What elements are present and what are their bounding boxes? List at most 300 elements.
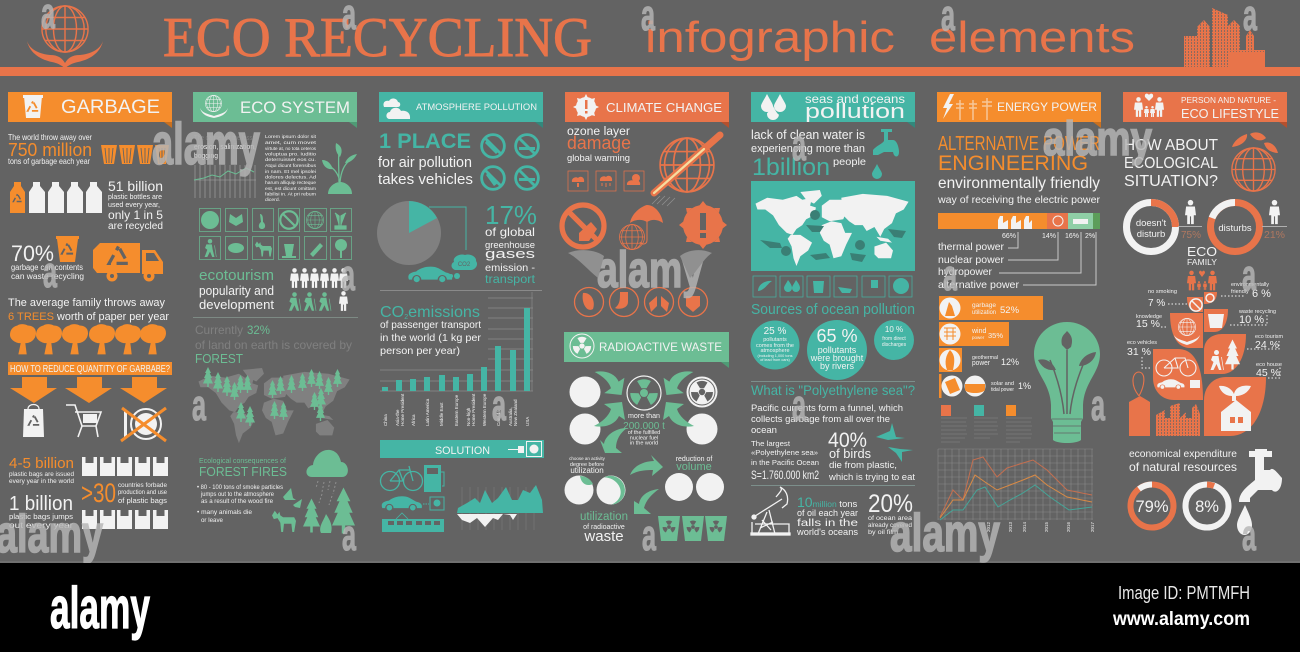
chart: energy lines: 2015 [1044,521,1049,532]
labels: eco lifestyle shares [1127,282,1283,379]
diagram: eco lifestyle leaves [1129,292,1280,436]
watermarks: a [1242,251,1256,300]
text: 750 million tons: tons of garbage each year [8,156,90,166]
text: how about ecological situation: SITUATION? [1124,173,1218,190]
chart: pie 17% [377,201,466,265]
map: forests of the world [198,367,350,443]
text: 51 billion bottles [108,178,163,232]
icon: reusable bag [23,404,44,437]
text: economical expenditure [1129,448,1237,474]
chart: CO2 bars: Middle East [439,402,444,426]
text: CO2 emissions [380,304,482,357]
circles: pollution sources: of lead from cars) [760,358,791,362]
legend: energy shares: nuclear power [938,254,1005,266]
bars: alternative energy: 12% [1001,357,1019,367]
chart: 8% donut [1186,484,1228,528]
text: utilization of radioactive waste: waste [583,528,624,545]
text: reduction of volume: volume [676,461,712,473]
labels: eco lifestyle shares: no smoking [1148,289,1177,295]
heading: eco lifestyle [1123,92,1287,128]
circles: pollution sources: were brought [810,353,864,363]
chart: area solution [457,485,543,530]
text: clean water: experiencing more than [751,143,865,155]
text: polyethylene sea: What is "Polyethylene sea"? [751,382,915,398]
icon: recycling can [56,236,79,262]
text: erosion causes [194,135,256,160]
icon: tap and drop [1237,449,1282,535]
heading: radioactive waste: RADIOACTIVE WASTE [599,342,722,354]
text: CO2 emissions: 2 [404,314,408,321]
header [0,6,1300,76]
icon: light bulb with sprout [1034,322,1100,443]
heading: eco lifestyle: ECO LIFESTYLE [1181,107,1279,121]
icon: recycling process circles [570,376,718,444]
circles: pollution sources: 65 % [816,326,858,346]
icon: car with CO2 cloud [408,254,477,282]
labels: eco lifestyle shares: friendly [1231,289,1249,295]
stat: 21%: 21% [1264,229,1285,241]
labels: eco lifestyle shares: 24 % [1255,339,1279,351]
stat: 40% of birds: which is trying to eat [828,472,915,483]
text: forest fires: • many animals die [197,510,253,516]
text: economical expenditure: economical expenditure [1129,448,1237,460]
text: 750 million tons: The world throw away over [8,132,92,142]
legend: energy shares: 2% [1085,233,1095,240]
text: average family: The average family throws away [8,297,165,309]
text: lorem ipsum: deterruisset eos cu. [265,157,316,162]
stat: more than 30 countries: of plastic bags [118,498,168,505]
text: average family: worth of paper per year [56,311,169,323]
chart: energy lines: 2013 [1008,521,1013,532]
stat: 4-5 billion: plastic bags are issued [9,471,74,478]
stat: 10 million tons: falls in the [797,518,859,529]
stat: 1 billion [9,493,74,530]
icon: utilization circles [564,470,630,506]
text: erosion causes: erosion, salinization, [194,144,256,151]
labels: eco lifestyle shares: eco house [1256,362,1282,368]
heading: solution: SOLUTION [435,445,490,457]
stat: 17%: greenhouse [485,240,535,250]
text: utilization degree: choose an activity [569,456,606,461]
labels: eco lifestyle shares: 31 % [1127,346,1151,358]
text: polyethylene sea: The largest [751,439,791,448]
stat: 4-5 billion [9,455,74,485]
chart: energy lines: 2017 [1090,521,1095,532]
stat: 10 million tons: world's oceans [796,527,858,538]
text: lorem ipsum: dicerd. [265,197,280,202]
stat: 40% of birds: 40% [828,429,867,452]
text: alternative power engineering: way of receiving the electric power [937,194,1100,206]
chart: energy share bar [938,213,1100,229]
arrows down [10,377,167,403]
chart: energy lines: 2014 [1022,521,1027,532]
stat: 17%: 17% [485,200,537,230]
icon: tap and drop [872,129,899,179]
text: CO2 emissions: emissions [408,304,480,321]
heading: seas: pollution [805,101,905,123]
chart: energy lines: 2016 [1066,521,1071,532]
heading: radioactive waste [564,332,729,368]
text: reduction of volume: reduction of [676,456,712,463]
text: 1 place [378,130,473,188]
text: lorem ipsum: dolores delectus. Ad [265,174,316,180]
circles: pollution sources: from direct [882,336,906,342]
chart: 8% donut: 8% [1195,498,1219,516]
text: 200 000 t: nuclear fuel [630,436,658,442]
icon: plastic bags row 1 [82,457,168,476]
bars: alternative energy: power [972,360,991,367]
text: 200 000 t: in the world [630,440,658,446]
icon: crossed plate [121,408,166,441]
chart: CO2 bars: New Zealand [513,399,518,426]
stat: 17%: emission - [485,262,536,274]
chart: energy lines: 2012 [986,521,991,532]
text: 51 billion bottles: plastic bottles are [108,192,162,201]
icon: oil derrick [751,487,790,535]
stat: 17%: transport [485,274,536,286]
icon: plastic bags row 2 [82,510,168,529]
chart: mini line [194,165,256,198]
text: CO2 emissions: person per year) [380,345,460,357]
circles: pollution sources: discharges [882,342,907,348]
footer: alamy strip [0,563,1300,652]
text: forest fires [197,458,287,524]
text: forest fires: Ecological consequences of [199,458,286,465]
stat: 17%: of global [485,225,535,239]
icon: globe and thermometer [654,135,720,193]
chart: CO2 bars: Eastern Europe [454,394,459,426]
text: garbage can contents [11,263,84,281]
stat: 75%: 75% [1181,229,1201,241]
circles: pollution sources: pollutants [818,345,857,355]
text: 51 billion bottles: 51 billion [108,178,163,194]
text: ozone layer: damage [567,133,631,153]
circles: pollution sources: atmosphere [760,348,790,354]
panel: energy power [937,92,1101,532]
text: 51 billion bottles: only 1 in 5 [108,208,163,222]
heading: eco lifestyle: PERSON AND NATURE - [1181,96,1276,105]
legend: energy shares [938,232,1096,291]
chart: CO2 bars: Asia-the [395,409,400,426]
text: clean water: people [833,157,866,168]
labels: eco lifestyle shares: 10 % [1239,314,1264,326]
stat: 21% [1262,200,1287,241]
labels: eco lifestyle shares: 15 % [1136,318,1160,330]
watermarks: a [342,511,356,560]
bars: alternative energy: 52% [1000,305,1020,316]
text: CO2 emissions: in the world (1 kg per [380,332,482,344]
heading: atmosphere: ATMOSPHERE POLLUTION [416,102,537,113]
legend: energy shares: 16% [1065,233,1079,240]
watermarks: alamy [0,505,103,564]
watermarks: a [792,381,806,430]
icon: people and hikers [289,268,348,311]
stat: more than 30 countries: production and use [118,490,168,496]
chart: 79% donut [1130,484,1174,528]
text: forest coverage: of land on earth is covered by [195,338,352,352]
icon: sun warning [679,201,727,249]
icon: recycling truck [93,243,163,282]
bars: alternative energy: power [972,335,985,340]
chart: CO2 bars: USA [525,417,530,426]
icon grid: weather [568,171,644,191]
stat: more than 30 countries: >30 [81,478,116,508]
stat: 20%: by oil film [868,529,898,536]
icon: family [1187,271,1217,290]
bars: alternative energy: 35% [988,331,1003,340]
circles: pollution sources: comes from the [756,343,794,349]
text: website: www.alamy.com [1112,609,1250,630]
map: polluted world [751,181,915,271]
heading: energy: ENERGY POWER [997,100,1097,114]
text: forest coverage [195,323,352,366]
banner: how to reduce [8,362,172,375]
circles: pollution sources: 25 % [764,326,787,337]
legend: energy shares: thermal power [938,241,1004,253]
labels: eco lifestyle shares: eco tourism [1255,334,1283,340]
stat: 17%: gases [485,246,536,261]
heading: garbage: GARBAGE [61,97,160,118]
watermarks: a [192,381,206,430]
text: lorem ipsum: fabilisi in. At pri rebum [265,192,316,196]
watermarks: a [943,251,957,300]
heading: atmosphere [379,92,543,128]
text: erosion causes: The causes of the loss: [194,135,254,142]
chart: CO2 bars: Latin America [425,398,430,426]
stat: 10 million tons [796,494,859,538]
icon: umbrella over globe [620,196,675,249]
text: utilization of radioactive waste: of radioactive [583,524,625,531]
chart: doesn't disturb donut [1126,202,1176,252]
watermarks: alamy [890,504,1000,563]
text: utilization degree: utilization [570,466,604,475]
text: ozone layer: global warming [567,153,630,163]
text: utilization of radioactive waste: utilization [580,511,628,523]
stat: more than 30 countries: countries forbade [118,483,168,489]
panel: atmosphere pollution [377,92,544,532]
text: forest fires: as a result of the wood fire [201,499,274,505]
stat: 40% of birds: of birds [829,446,871,461]
icon: volume circles [665,473,724,501]
text: alternative power engineering: ENGINEERING [938,152,1088,175]
heading: ecosystem: ECO SYSTEM [240,98,350,117]
stat: 17% [485,200,537,286]
legend: energy shares: 14% [1042,233,1056,240]
text: forest coverage: FOREST [195,352,243,366]
text: economical expenditure: of natural resources [1129,460,1237,474]
text: clean water: 1billion [752,154,830,181]
legend: energy shares: alternative power [938,279,1020,291]
legend: energy shares: hydropower [938,266,992,278]
heading: solution [380,440,544,458]
text: forest coverage: 32% [247,323,270,337]
chart: doesn't disturb donut: disturb [1137,229,1165,240]
text: polyethylene sea [751,382,915,482]
bars: alternative energy: solar and [991,381,1014,387]
bars: alternative energy: 1% [1018,381,1031,391]
stat: 70%: 70% [11,241,54,266]
banner: how to reduce: HOW TO REDUCE QUANTITY OF GARBABE? [10,364,170,375]
chart: CO2 bars: Western Europe [482,393,487,426]
text: lorem ipsum: Lorem ipsum dolor sit [265,134,317,139]
text: forest fires: jumps out to the atmosphere [200,492,275,498]
text: average family [8,297,169,323]
text: 51 billion bottles: are recycled [108,221,163,232]
text: eco family [1187,244,1218,267]
legend: energy shares: 66% [1002,233,1016,240]
text: how about ecological situation: HOW ABOUT [1124,137,1218,154]
text: lorem ipsum: est, est dicunt omittam [265,186,316,191]
text: lorem ipsum: virtute at, no tota ceteros [265,146,317,151]
subtitle second word: elements [929,13,1135,62]
labels: eco lifestyle shares: knowledge [1136,314,1162,320]
text: ozone layer: ozone layer [567,126,630,138]
chart: CO2 bars: Australia, [508,407,513,426]
icon: health circles [574,288,708,316]
logo: alamy: alamy [50,576,150,641]
chart: CO2 bars [380,292,533,426]
text: average family: 6 TREES [8,311,54,323]
stat: 1 billion: out every year [9,521,73,530]
text: polyethylene sea: in the Pacific Ocean [751,458,819,467]
text: lorem ipsum: voluptua pro. Iuditio [265,152,316,156]
chart: CO2 bars: China [383,414,388,426]
icon: city skyline [1184,8,1265,67]
bars: alternative energy [939,296,1043,398]
labels: eco lifestyle shares: environmentally [1231,282,1269,288]
chart: CO2 bars: Home President [471,393,476,426]
icon: prohibition signs [482,135,538,189]
bars: alternative energy: geothermal [972,355,998,361]
chart: doesn't disturb donut: doesn't [1136,218,1167,229]
circles: pollution sources [750,320,914,380]
header band [0,67,1300,76]
text: 750 million tons [8,132,92,166]
text: ozone layer [567,126,631,163]
stat: 10 million tons: of oil each year [797,508,858,519]
text: forest fires: • 80 - 100 tons of smoke particles [197,485,283,491]
text: 200 000 t [623,413,665,446]
icon: globe with leaves [1232,132,1278,191]
text: 750 million tons: 750 million [8,140,92,160]
panel: radioactive waste [564,332,729,545]
bars: alternative energy: wind [971,328,987,335]
icon: cloud and burning forest [272,450,355,534]
stat: 1 billion: 1 billion [9,493,73,515]
text: ecotourism: popularity and [199,284,274,298]
heading: climate change [565,92,729,128]
text: lorem ipsum: Atqui dicunt forensibus [265,163,317,168]
text: CO2 emissions: of passenger transport [380,320,481,331]
text: lorem ipsum: amet, cum movet [265,140,317,145]
watermarks: a [43,248,57,297]
text: sources of ocean pollution: Sources of ocean pollution [751,302,915,318]
stat: 20%: 20% [868,490,913,518]
text: how about ecological situation [1124,137,1218,190]
text: how about ecological situation: ECOLOGICAL [1124,155,1218,172]
arrows: leaf arrows [594,371,694,514]
text: forest fires: or leave [201,518,224,524]
chart: CO2 bars: Home President [400,393,405,426]
labels: eco lifestyle shares: 6 % [1252,288,1271,300]
chart: 79% donut: 79% [1135,498,1169,516]
stat: 75% [1178,200,1202,241]
stat: 20%: of ocean area [868,515,912,522]
text: utilization degree [569,456,606,475]
icon: clean transport [380,465,444,532]
heading: garbage [8,92,172,128]
heading: energy [937,92,1101,128]
title: ECO RECYCLING [163,7,592,69]
watermarks: a [792,121,806,170]
subtitle: infographic [645,13,895,62]
bars: alternative energy: tidal power [991,387,1014,393]
text: ecotourism: ecotourism [199,267,274,284]
icon: six trees [10,324,166,354]
icon grid: ocean [753,276,912,297]
heading: seas [751,92,915,128]
text: alternative power engineering: environmentally friendly [938,175,1100,192]
chart: disturbs donut [1210,202,1260,252]
watermarks: a [341,251,355,300]
text: polyethylene sea: ocean [751,425,777,436]
panel: garbage [8,92,172,530]
text: eco family: ECO [1187,244,1217,259]
labels: eco lifestyle shares: 45 % [1256,367,1280,379]
chart: CO2 bars: Africa [411,414,416,426]
text: image id: Image ID: PMTMFH [1118,583,1250,603]
stat: 4-5 billion: 4-5 billion [9,455,74,472]
text: alternative power engineering: ALTERNATIVE POWER [938,133,1100,155]
text: 1 place: takes vehicles [378,172,473,188]
text: clean water: lack of clean water is [751,127,865,142]
text: garbage can contents: can waste recycling [11,272,84,281]
bars: alternative energy: utilization [972,310,996,316]
circles: pollution sources: by rivers [820,361,854,371]
watermarks: alamy [597,241,703,298]
stat: 40% of birds [828,429,915,483]
heading: climate change: CLIMATE CHANGE [606,100,722,115]
chart: disturbs donut: disturbs [1218,223,1252,234]
stat: more than 30 countries [81,478,168,508]
text: utilization of radioactive waste [580,511,628,545]
text: erosion causes: bogging [194,153,218,160]
icon: shopping cart [66,405,101,437]
circles: pollution sources: (including 1,000 tons [757,354,793,358]
labels: eco lifestyle shares: eco vehicles [1127,340,1157,346]
text: 200 000 t: of the fulfilled [628,430,660,436]
text: garbage can contents: garbage can contents [11,263,83,272]
text: CO2 emissions: CO [380,304,404,321]
text: utilization degree: degree before [570,462,604,468]
legend: colour keys [941,405,1032,442]
icon: globe in hands [27,6,103,68]
text: 1 place: for air pollution [378,155,472,171]
labels: eco lifestyle shares: waste recycling [1238,309,1276,315]
text: polyethylene sea: collects garbage from all over the [751,414,890,425]
watermarks: alamy [1043,113,1152,166]
watermarks: a [1242,511,1256,560]
text: ecotourism [199,267,275,312]
heading: ecosystem [193,92,357,128]
text: 1 place: 1 PLACE [379,130,471,153]
stat: 20%: already covered [868,522,912,529]
icon: sprout [322,143,357,194]
stat: 4-5 billion: every year in the world [9,478,74,485]
heading: seas: seas and oceans [805,92,905,106]
text: reduction of volume [676,456,712,473]
icon: radioactive bins [658,516,727,541]
